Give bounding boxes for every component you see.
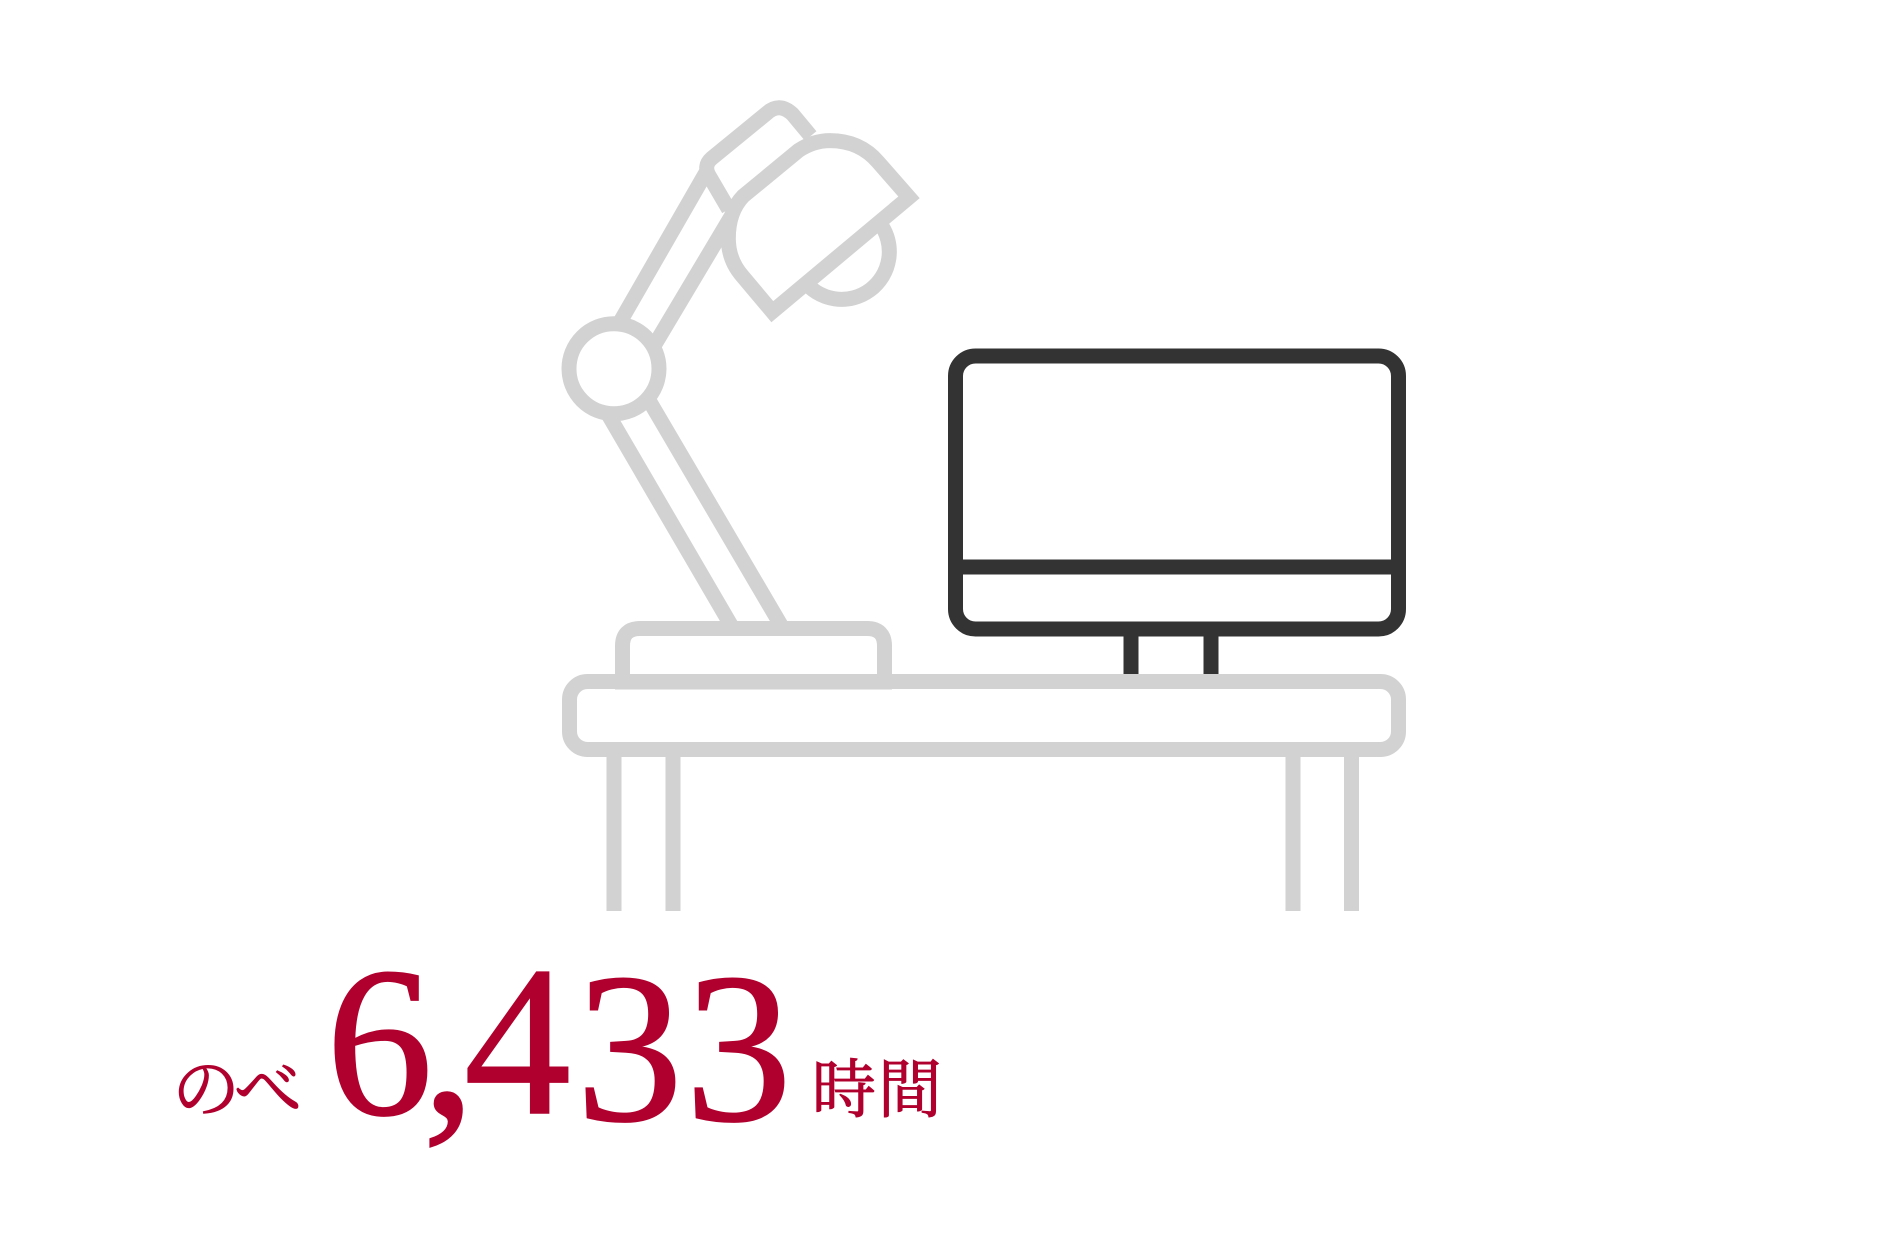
bulb (803, 223, 889, 299)
stat: total hours (172, 923, 942, 1167)
lamp upper arm (612, 169, 735, 361)
shade connector (707, 108, 811, 209)
shade (728, 141, 909, 312)
lamp lower arm (595, 385, 785, 632)
icon: desk lamp (569, 108, 909, 689)
icon: monitor (948, 356, 1406, 674)
lamp joint (569, 324, 659, 414)
big number: 6,433 (326, 923, 792, 1167)
lamp shade group (707, 108, 909, 312)
unit label: 時間 (812, 1055, 942, 1126)
prefix label: のべ (172, 1052, 302, 1128)
icon: desk (570, 682, 1398, 911)
lamp base (615, 628, 892, 689)
